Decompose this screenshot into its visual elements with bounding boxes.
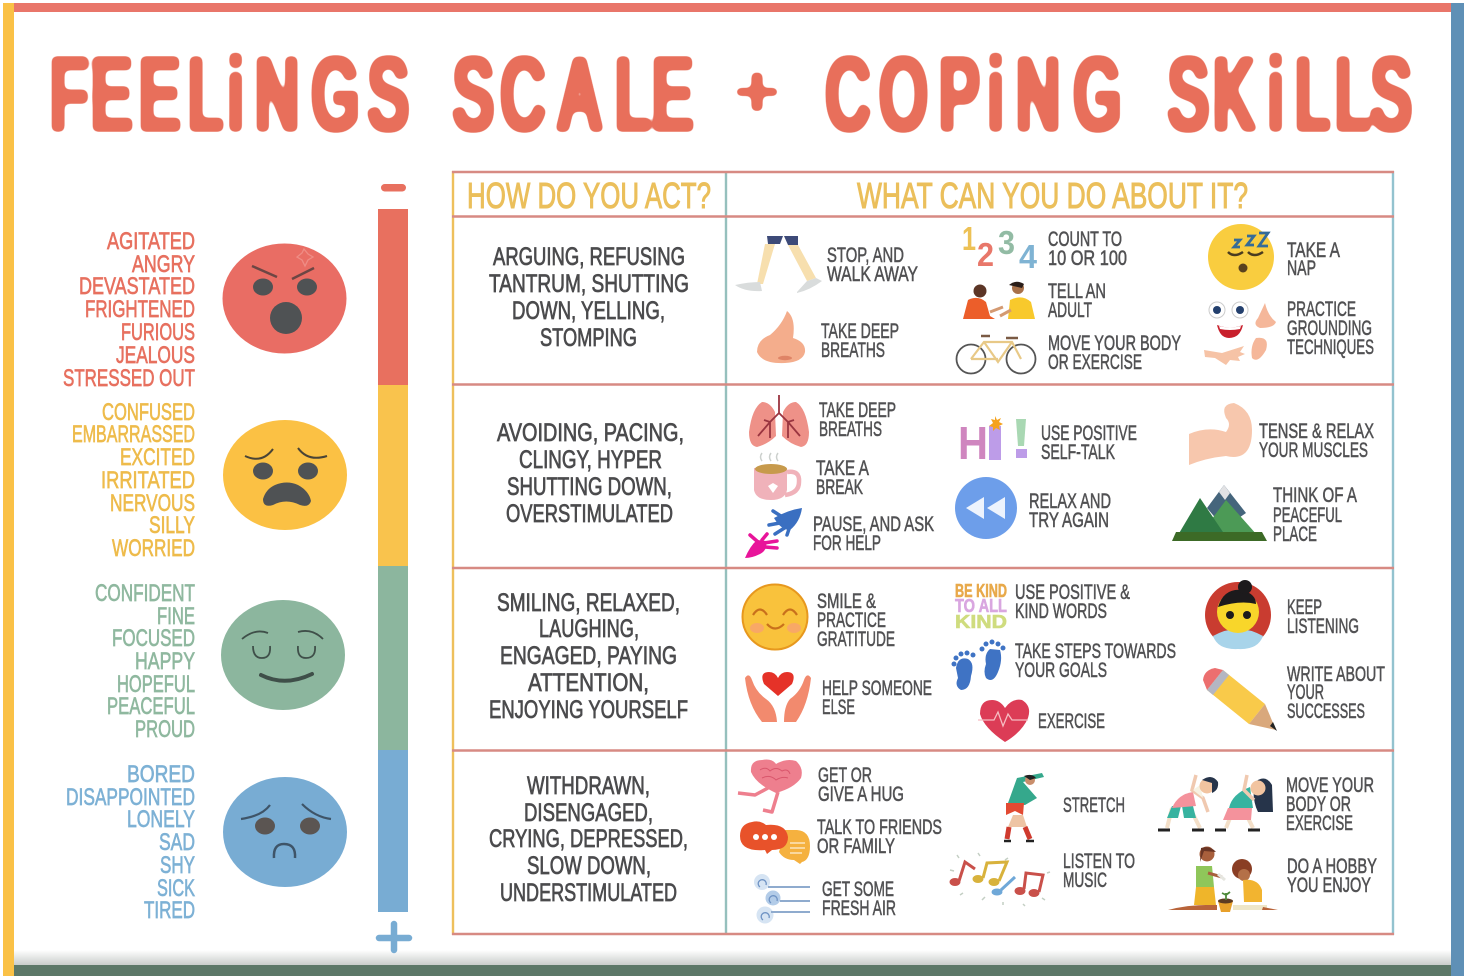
panel: coping skills row 1 text: PRACTICE — [1287, 298, 1356, 321]
panel: feelings labels green: HOPEFUL — [117, 671, 195, 698]
panel: coping skills row 2 text: BREATHS — [819, 418, 882, 441]
panel: coping skills row 1 text: NAP — [1287, 257, 1316, 280]
panel: coping skills row 1 text: COUNT TO — [1048, 228, 1122, 251]
icon: brain hugging — [738, 760, 802, 812]
icon: speech bubbles — [740, 821, 810, 864]
panel: coping skills row 3 text: ELSE — [822, 696, 855, 719]
panel: coping skills row 1 text: ADULT — [1048, 299, 1092, 322]
panel: coping skills row 1 text — [821, 228, 1374, 374]
panel: coping skills row 3 text: EXERCISE — [1038, 710, 1105, 733]
panel: feelings labels blue — [66, 761, 195, 924]
text: actions row 2: OVERSTIMULATED — [506, 500, 673, 528]
panel: coping skills row 1 text: GROUNDING — [1287, 317, 1372, 340]
icon: lungs — [749, 395, 809, 447]
icon: mug — [754, 453, 799, 500]
icon: rewind button — [955, 477, 1017, 539]
icon: smiling face — [742, 584, 808, 650]
icon: nose — [757, 311, 805, 363]
icon: hands with heart — [745, 672, 811, 722]
panel: coping skills row 3 text: WRITE ABOUT — [1287, 663, 1385, 686]
panel: feelings labels yellow: IRRITATED — [101, 467, 195, 494]
panel: feelings labels green — [95, 580, 195, 743]
icon: numbers 1234: 4 — [1019, 238, 1038, 275]
icon: stretching person — [1004, 773, 1044, 841]
panel: feelings labels green: FINE — [157, 603, 195, 630]
panel: feelings labels blue: DISAPPOINTED — [66, 784, 195, 811]
panel: feelings labels red: STRESSED OUT — [63, 365, 195, 392]
icon: reaching hands — [745, 508, 802, 558]
panel: feelings labels blue: SAD — [159, 829, 195, 856]
panel: feelings labels green: FOCUSED — [112, 625, 195, 652]
panel: coping skills row 4 text: LISTEN TO — [1063, 850, 1135, 873]
title: SKiLLS — [1168, 39, 1411, 150]
panel: coping skills row 3 text: YOUR GOALS — [1015, 659, 1107, 682]
panel: coping skills row 4 text: OR FAMILY — [817, 835, 895, 858]
icon: angry red face — [222, 244, 346, 354]
panel: coping skills row 1 text: MOVE YOUR BODY — [1048, 332, 1181, 355]
icon: anxious yellow face — [223, 420, 347, 530]
text: actions row 3: ENGAGED, PAYING — [500, 642, 677, 670]
table grid — [452, 171, 1394, 935]
panel: feelings labels blue: TIRED — [144, 897, 195, 924]
icon: listening girl — [1205, 580, 1271, 649]
panel: feelings labels green: PEACEFUL — [107, 693, 195, 720]
panel: coping skills row 2 text: THINK OF A — [1273, 484, 1357, 507]
panel: coping skills row 2 text: PEACEFUL — [1273, 504, 1342, 527]
heading: what can you do about it: WHAT CAN YOU DO ABOUT IT? — [857, 175, 1248, 216]
panel: coping skills row 2 text: TRY AGAIN — [1029, 509, 1109, 532]
text: actions row 1: STOMPING — [540, 324, 637, 352]
text: actions row 4: WITHDRAWN, — [527, 772, 650, 800]
panel: coping skills row 1 text: 10 OR 100 — [1048, 247, 1127, 270]
text: actions row 3: ENJOYING YOURSELF — [489, 696, 688, 724]
panel: feelings labels red: FURIOUS — [121, 319, 195, 346]
panel: coping skills row 2 text: YOUR MUSCLES — [1259, 439, 1368, 462]
icon: sleeping face — [1208, 224, 1274, 290]
panel: coping skills row 2 text: PLACE — [1273, 523, 1317, 546]
panel: coping skills row 4 text — [817, 764, 1377, 920]
panel: coping skills row 3 text: TAKE STEPS TOWARDS — [1015, 640, 1176, 663]
panel: feelings labels red: AGITATED — [107, 228, 195, 255]
panel: coping skills row 2 text: TAKE DEEP — [819, 399, 896, 422]
text: actions row 4: SLOW DOWN, — [527, 852, 651, 880]
panel: feelings labels red: JEALOUS — [116, 342, 195, 369]
panel: feelings labels yellow: SILLY — [149, 512, 195, 539]
panel: feelings labels blue: SHY — [160, 852, 195, 879]
icon: sad blue face — [223, 777, 347, 887]
panel: feelings labels green: PROUD — [135, 716, 195, 743]
panel: coping skills row 3 text: YOUR — [1287, 681, 1324, 704]
icon: exercising kids — [1158, 775, 1278, 912]
icon: walking legs — [735, 236, 822, 293]
text: actions row 3: SMILING, RELAXED, — [497, 589, 680, 617]
scale bar — [378, 184, 409, 950]
panel: coping skills row 2 text: USE POSITIVE — [1041, 422, 1137, 445]
icon: Hi! — [958, 416, 1027, 469]
panel: coping skills row 1 text: WALK AWAY — [827, 263, 918, 286]
icon: heartbeat heart — [978, 700, 1029, 742]
panel: coping skills row 3 text: USE POSITIVE & — [1015, 581, 1130, 604]
text: actions row 1: ARGUING, REFUSING — [493, 243, 685, 271]
icon: numbers 1234: 3 — [998, 224, 1015, 261]
panel: coping skills row 4 text: GET OR — [818, 764, 872, 787]
panel: coping skills row 3 text: PRACTICE — [817, 609, 886, 632]
icon: be kind word art: TO ALL — [955, 596, 1007, 616]
panel: coping skills row 4 text: MOVE YOUR — [1286, 774, 1374, 797]
text: actions row 2: SHUTTING DOWN, — [507, 473, 672, 501]
text: actions row 4 — [489, 772, 688, 907]
icon: blue footprints — [952, 640, 1006, 690]
text: actions row 4: DISENGAGED, — [524, 799, 653, 827]
icon: grounding senses — [1204, 302, 1276, 365]
panel: coping skills row 4 text: GIVE A HUG — [818, 783, 904, 806]
title: + — [736, 52, 778, 132]
text: actions row 2: CLINGY, HYPER — [519, 446, 662, 474]
title: FEELiNGS — [50, 39, 408, 150]
panel: coping skills row 1 text: TELL AN — [1048, 280, 1106, 303]
text: actions row 2: AVOIDING, PACING, — [497, 419, 684, 447]
heading: how do you act: HOW DO YOU ACT? — [467, 175, 711, 216]
panel: feelings labels red — [63, 228, 195, 392]
panel: coping skills row 2 text: RELAX AND — [1029, 490, 1111, 513]
icon: bicycle — [956, 336, 1036, 374]
title: SCALE — [453, 39, 692, 150]
icon: numbers 1234: 2 — [977, 236, 994, 273]
panel: coping skills row 3 text — [817, 581, 1385, 733]
panel: feelings labels blue: SICK — [157, 875, 195, 902]
text: actions row 3: ATTENTION, — [528, 669, 649, 697]
panel: coping skills row 4 text: STRETCH — [1063, 794, 1125, 817]
panel: coping skills row 3 text: HELP SOMEONE — [822, 677, 932, 700]
panel: coping skills row 1 text: BREATHS — [821, 339, 885, 362]
icon: wind — [754, 874, 810, 924]
panel: coping skills row 2 text — [813, 399, 1374, 555]
text: actions row 4: UNDERSTIMULATED — [500, 879, 677, 907]
panel: coping skills row 1 text: STOP, AND — [827, 244, 904, 267]
panel: coping skills row 1 text: TAKE DEEP — [821, 320, 899, 343]
panel: feelings labels yellow: NERVOUS — [110, 490, 195, 517]
panel: coping skills row 1 text: OR EXERCISE — [1048, 351, 1142, 374]
panel: coping skills row 1 text: TECHNIQUES — [1287, 336, 1374, 359]
panel: coping skills row 4 text: GET SOME — [822, 878, 894, 901]
panel: coping skills row 3 text: SUCCESSES — [1287, 700, 1365, 723]
icon: music notes — [950, 853, 1050, 906]
icon: flexed muscle — [1189, 403, 1252, 465]
icon: be kind word art: BE KIND — [955, 581, 1007, 601]
panel: coping skills row 3 text: GRATITUDE — [817, 628, 895, 651]
panel: feelings labels yellow: WORRIED — [112, 535, 195, 562]
text: actions row 1 — [489, 243, 689, 352]
text: actions row 3 — [489, 589, 688, 724]
panel: coping skills row 2 text: SELF-TALK — [1041, 441, 1115, 464]
panel: feelings labels yellow: CONFUSED — [102, 399, 195, 426]
text: actions row 1: TANTRUM, SHUTTING — [489, 270, 689, 298]
panel: coping skills row 1 text: TAKE A — [1287, 239, 1340, 262]
icon: calm green face — [221, 600, 345, 710]
panel: feelings labels green: CONFIDENT — [95, 580, 195, 607]
panel: coping skills row 3 text: SMILE & — [817, 590, 876, 613]
panel: coping skills row 2 text: FOR HELP — [813, 532, 881, 555]
icon: mountains — [1172, 485, 1267, 541]
panel: coping skills row 4 text: YOU ENJOY — [1287, 874, 1371, 897]
panel: feelings labels red: ANGRY — [132, 251, 195, 278]
icon: be kind word art: KIND — [955, 612, 1007, 632]
panel: coping skills row 2 text: TAKE A — [816, 457, 869, 480]
panel: feelings labels blue: LONELY — [127, 806, 195, 833]
panel: coping skills row 4 text: BODY OR — [1286, 793, 1351, 816]
icon: pencil — [1203, 668, 1277, 731]
icon: be kind word art — [955, 581, 1007, 632]
panel: feelings labels red: FRIGHTENED — [85, 296, 195, 323]
title — [50, 39, 1411, 150]
text: actions row 2 — [497, 419, 684, 528]
panel: coping skills row 4 text: DO A HOBBY — [1287, 855, 1377, 878]
icon: Hi!: H — [958, 417, 988, 469]
panel: coping skills row 3 text: LISTENING — [1287, 615, 1359, 638]
panel: coping skills row 2 text: TENSE & RELAX — [1259, 420, 1374, 443]
title: COPiNG — [826, 39, 1121, 150]
panel: coping skills row 4 text: MUSIC — [1063, 869, 1107, 892]
text: actions row 1: DOWN, YELLING, — [512, 297, 665, 325]
panel: feelings labels red: DEVASTATED — [79, 273, 195, 300]
panel: feelings labels green: HAPPY — [135, 648, 195, 675]
panel: coping skills row 4 text: EXERCISE — [1286, 812, 1353, 835]
panel: coping skills row 2 text: BREAK — [816, 476, 863, 499]
panel: coping skills row 3 text: KIND WORDS — [1015, 600, 1107, 623]
icon: talking people — [963, 282, 1035, 319]
panel: coping skills row 4 text: TALK TO FRIENDS — [817, 816, 942, 839]
panel: feelings labels yellow: EXCITED — [120, 444, 195, 471]
panel: coping skills row 4 text: FRESH AIR — [822, 897, 896, 920]
icon: numbers 1234 — [962, 220, 1038, 275]
panel: feelings labels yellow: EMBARRASSED — [72, 421, 195, 448]
panel: feelings labels blue: BORED — [127, 761, 195, 788]
text: actions row 4: CRYING, DEPRESSED, — [489, 825, 688, 853]
panel: feelings labels yellow — [72, 399, 195, 562]
text: actions row 3: LAUGHING, — [539, 615, 639, 643]
icon: numbers 1234: 1 — [962, 220, 976, 257]
panel: coping skills row 2 text: PAUSE, AND ASK — [813, 513, 934, 536]
panel: coping skills row 3 text: KEEP — [1287, 596, 1322, 619]
